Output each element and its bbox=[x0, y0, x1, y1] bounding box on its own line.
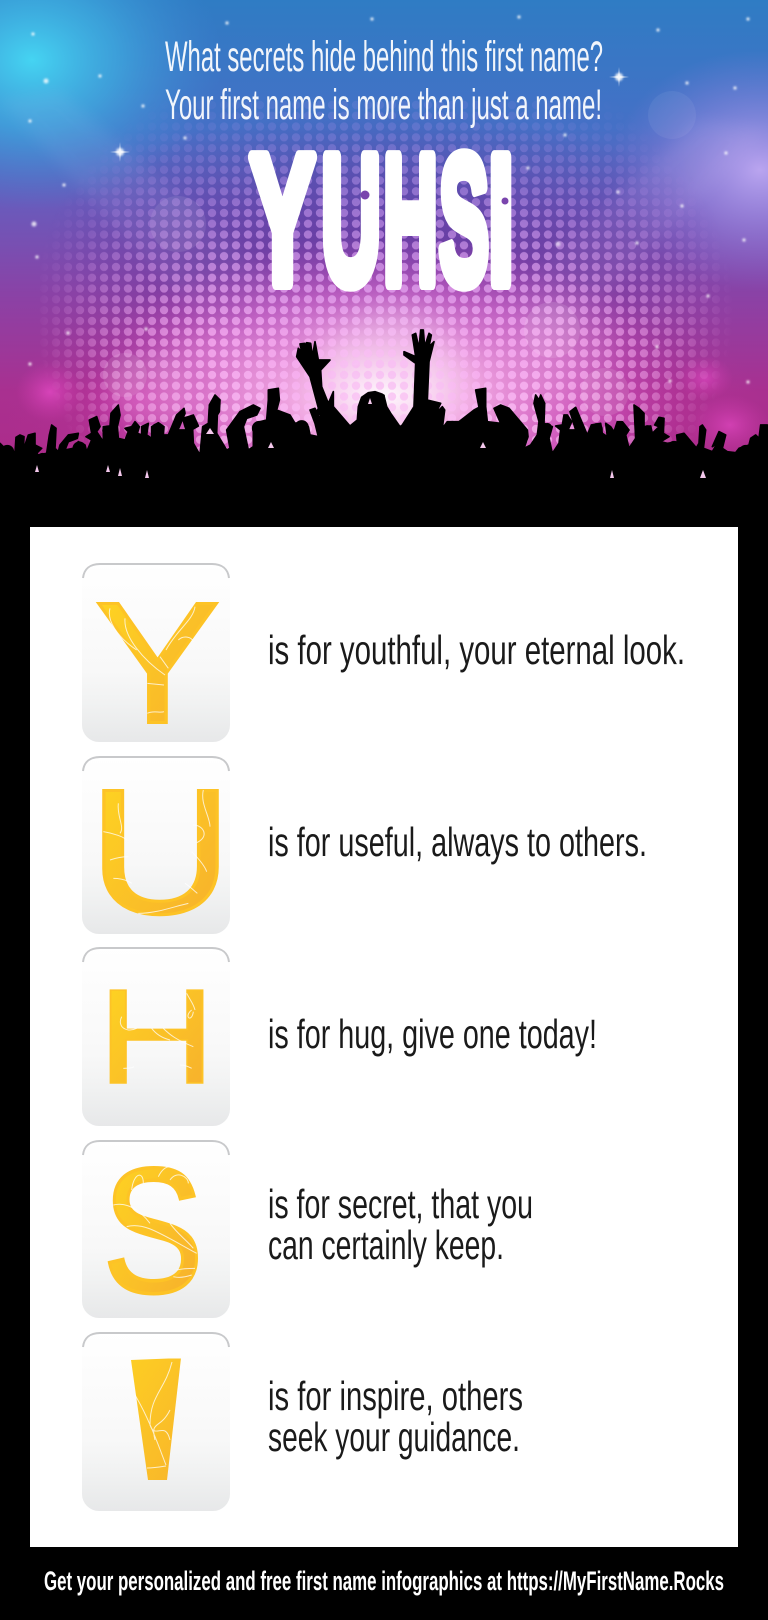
letter tile I: I bbox=[97, 1321, 215, 1519]
title: name YUHSI: S bbox=[439, 117, 489, 322]
bokeh circles bbox=[103, 91, 696, 430]
letter tile S bbox=[82, 1131, 230, 1331]
panel: letter meanings bbox=[30, 527, 738, 1547]
text: I meaning bbox=[268, 1373, 523, 1460]
letter tile Y: Y bbox=[95, 567, 220, 760]
crowd silhouette bbox=[0, 330, 768, 530]
text: H meaning: is for hug, give one today! bbox=[268, 1011, 597, 1057]
light dot matrix bbox=[52, 101, 720, 452]
text: S meaning bbox=[268, 1181, 533, 1268]
text: S meaning: is for secret, that you bbox=[268, 1181, 533, 1227]
title: name YUHSI: I bbox=[488, 117, 514, 322]
text: I meaning: seek your guidance. bbox=[268, 1414, 520, 1460]
letter tile S: S bbox=[103, 1131, 203, 1331]
stars bbox=[28, 16, 750, 384]
letter tile H: H bbox=[97, 961, 216, 1112]
text: I meaning: is for inspire, others bbox=[268, 1373, 523, 1419]
header background: stage lights bbox=[0, 0, 768, 454]
title: name YUHSI: U bbox=[321, 117, 381, 322]
text: S meaning: can certainly keep. bbox=[268, 1222, 504, 1268]
title: name YUHSI: H bbox=[383, 117, 438, 322]
letter tile H bbox=[82, 947, 230, 1126]
letter tile U: U bbox=[89, 753, 232, 952]
title: name YUHSI: Y bbox=[250, 117, 315, 322]
title: name YUHSI bbox=[250, 117, 514, 322]
